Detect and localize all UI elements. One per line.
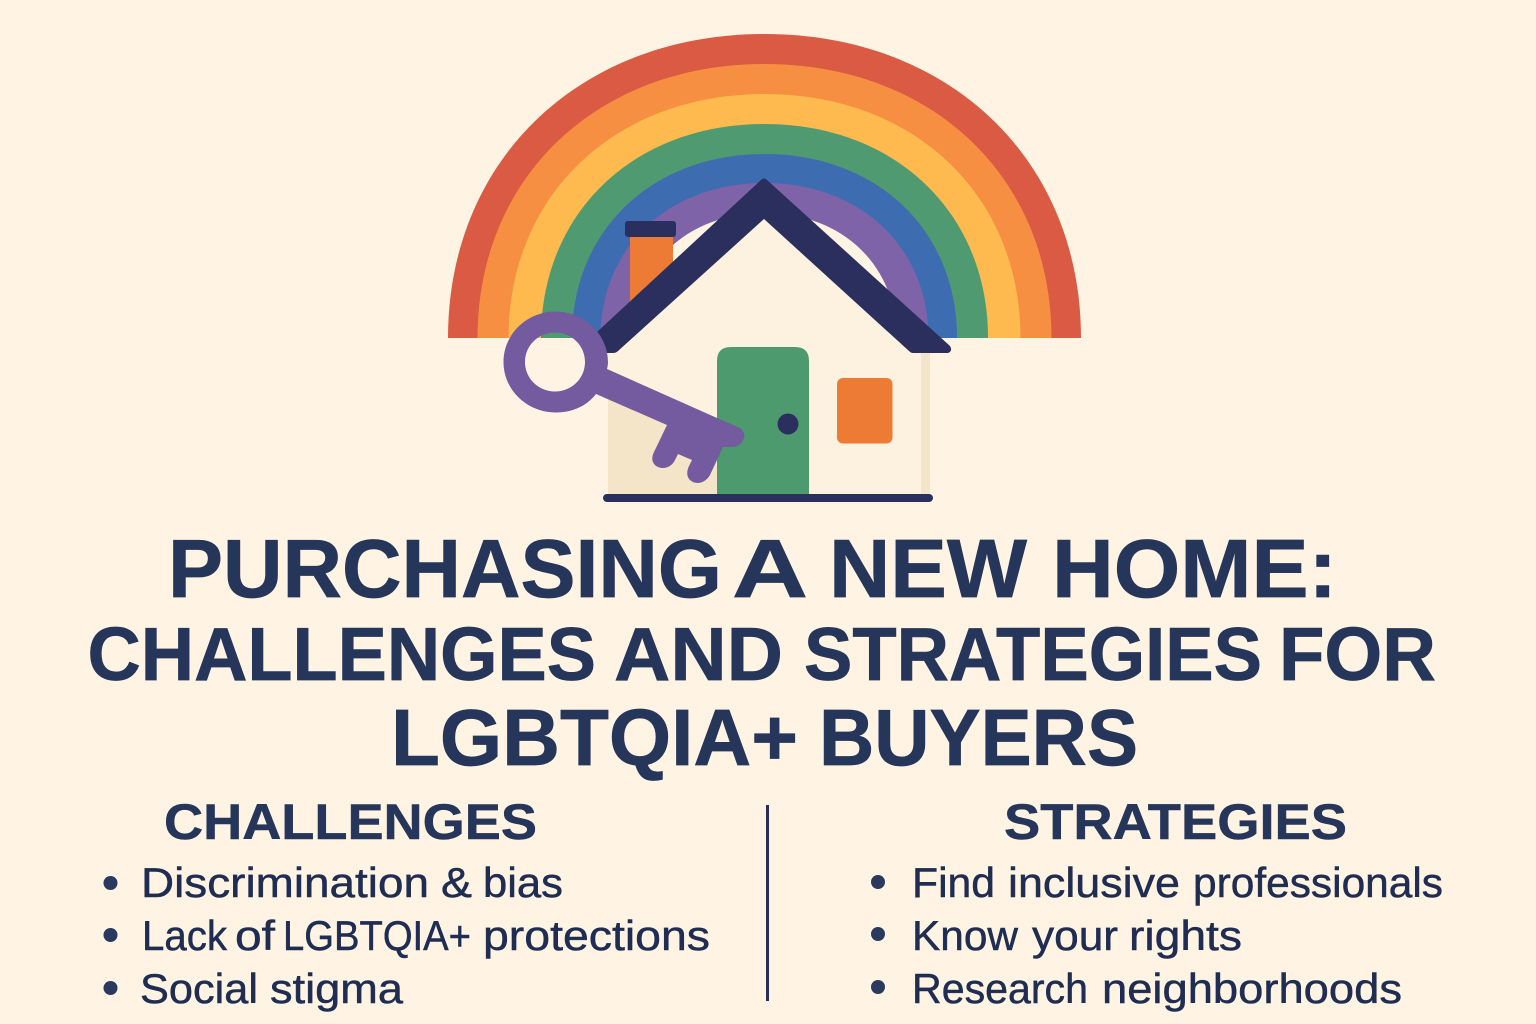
list: challenges	[104, 859, 710, 1012]
title: A	[732, 523, 808, 615]
title: CHALLENGES	[88, 612, 596, 696]
list: challenges: Discrimination	[141, 859, 429, 906]
list: challenges: LGBTQIA+	[283, 912, 471, 959]
list: strategies: professionals	[1193, 859, 1443, 906]
rainbow	[448, 34, 1081, 338]
list: challenges: protections	[483, 912, 710, 959]
door	[717, 347, 809, 494]
list: challenges: stigma	[270, 965, 404, 1012]
list: challenges: Lack	[142, 912, 228, 959]
list: challenges: of	[235, 912, 275, 959]
roof	[597, 178, 951, 353]
list: strategies: your	[1032, 912, 1118, 959]
title	[88, 523, 1436, 782]
list: strategies: Research	[912, 965, 1088, 1012]
ground line	[603, 494, 933, 502]
list: challenges: bias	[483, 859, 563, 906]
illustration: rainbow, house and key	[448, 34, 1081, 502]
list: strategies: neighborhoods	[1102, 965, 1402, 1012]
title: PURCHASING	[168, 523, 722, 615]
title: HOME:	[1052, 523, 1337, 615]
window	[837, 378, 892, 444]
title: LGBTQIA+	[391, 693, 798, 782]
house wall	[608, 200, 930, 494]
title: NEW	[829, 523, 1027, 615]
chimney	[625, 221, 676, 305]
title: FOR	[1279, 612, 1436, 696]
heading: strategies: STRATEGIES	[1004, 794, 1347, 850]
list: strategies	[871, 859, 1443, 1012]
list: strategies: Know	[912, 912, 1019, 959]
list: challenges: &	[441, 859, 472, 906]
list: strategies: Find	[912, 859, 995, 906]
heading: challenges: CHALLENGES	[164, 794, 537, 850]
list: strategies: rights	[1129, 912, 1242, 959]
door knob	[778, 414, 798, 434]
panel: strategies	[871, 794, 1443, 1012]
icon: key	[504, 312, 744, 483]
title: STRATEGIES	[804, 612, 1262, 696]
title: BUYERS	[819, 693, 1138, 782]
list: challenges: Social	[140, 965, 258, 1012]
panel: challenges	[104, 794, 710, 1012]
list: strategies: inclusive	[1008, 859, 1180, 906]
title: AND	[614, 612, 783, 696]
